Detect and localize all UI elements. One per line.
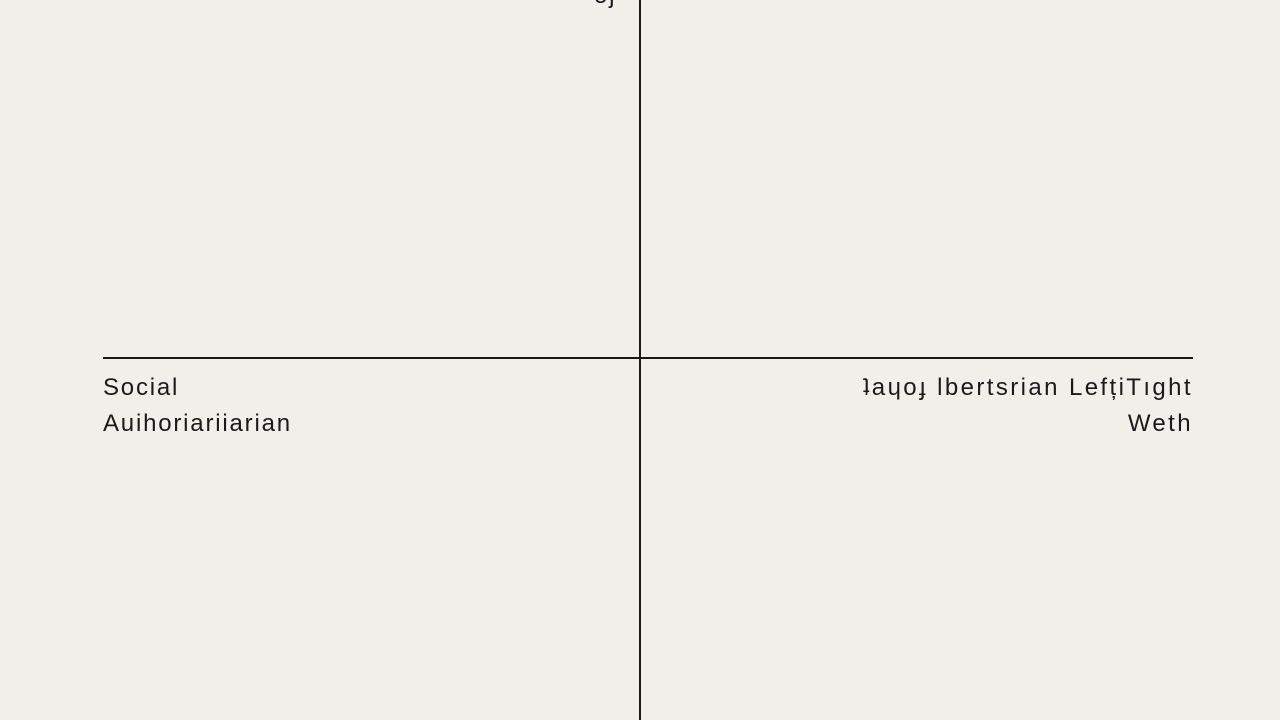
right axis label: Weth <box>1128 410 1193 437</box>
left axis label: Auihoriariiarian <box>103 410 292 437</box>
left axis label <box>103 374 292 437</box>
left axis label: Social <box>103 374 179 401</box>
right axis label: ʇaɥoɟ lbertsrian LefțiTıght <box>863 374 1193 401</box>
horizontal axis <box>103 357 1193 359</box>
right axis label <box>863 374 1193 437</box>
vertical axis <box>639 0 641 720</box>
